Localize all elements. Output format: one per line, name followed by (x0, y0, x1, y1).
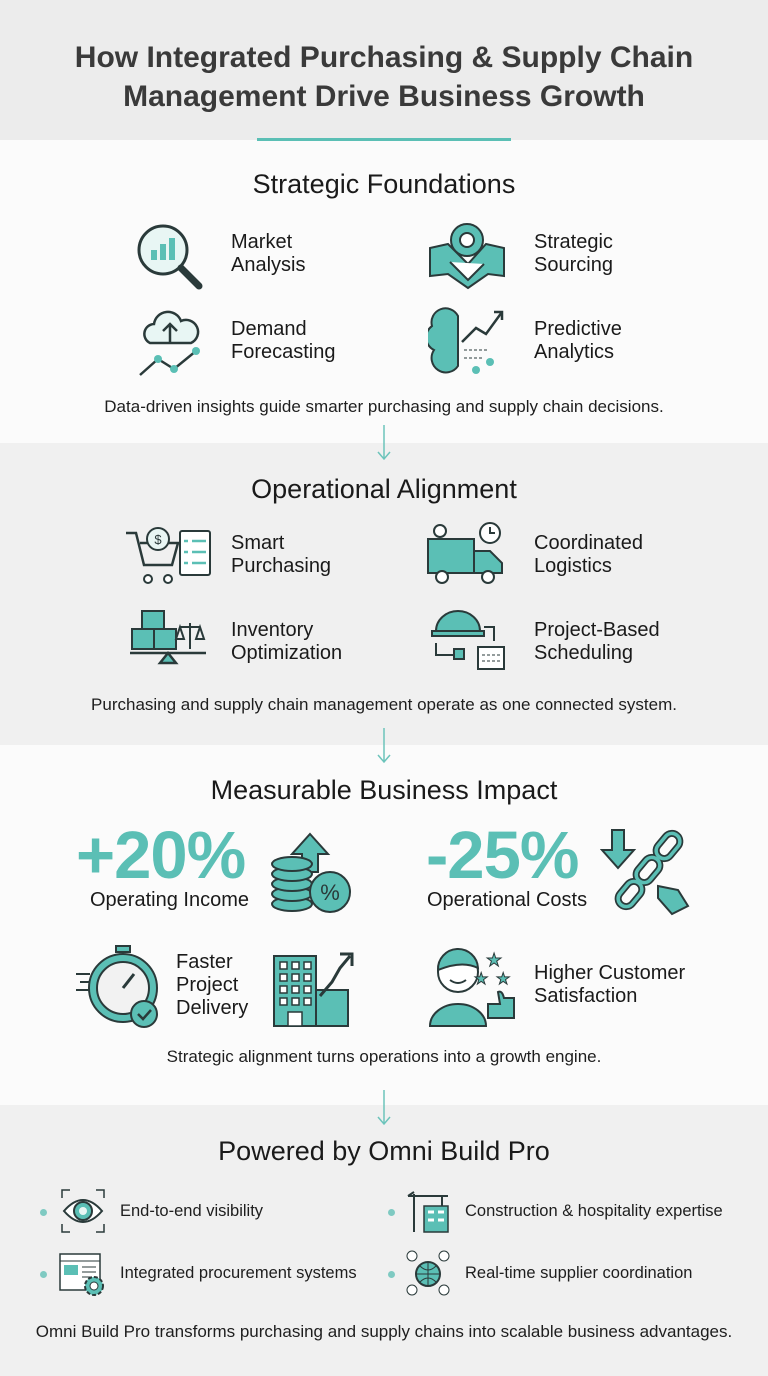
label: coordinated logistics: Coordinated (534, 532, 643, 554)
arrow 2 (378, 728, 390, 763)
icon: crane (408, 1191, 449, 1233)
item: real-time supplier coordination: Real-time supplier coordination (465, 1264, 692, 1282)
label: project-based scheduling: Scheduling (534, 642, 633, 664)
label: faster project delivery: Delivery (176, 997, 248, 1019)
icon: satisfied customer: ★ (486, 950, 502, 971)
item: end-to-end visibility (40, 1189, 263, 1233)
label: faster project delivery: Faster (176, 951, 233, 973)
icon: coins: % (320, 880, 340, 905)
icon: procurement screen (59, 1253, 104, 1296)
caption 3: Strategic alignment turns operations into a growth engine. (167, 1047, 601, 1066)
label: inventory optimization: Optimization (231, 642, 342, 664)
item: integrated procurement systems (40, 1253, 357, 1296)
stat: +20%: +20% (76, 818, 245, 893)
label: higher customer satisfaction (534, 962, 685, 1007)
heading: powered by omni build pro: Powered by Omni Build Pro (218, 1136, 550, 1166)
label: operating income: Operating Income (90, 889, 249, 911)
icon: broken chain (600, 829, 690, 916)
icon: stopwatch (76, 945, 158, 1028)
label: predictive analytics (534, 318, 622, 363)
label: strategic sourcing (534, 231, 613, 276)
label: demand forecasting: Forecasting (231, 341, 336, 363)
caption 1: Data-driven insights guide smarter purchasing and supply chain decisions. (104, 397, 664, 416)
item: integrated procurement systems: Integrated procurement systems (120, 1264, 357, 1282)
label: smart purchasing (231, 532, 331, 577)
caption 4: Omni Build Pro transforms purchasing and supply chains into scalable business advantages. (36, 1322, 732, 1341)
icon: smart purchasing: $ (154, 532, 162, 547)
title: How Integrated Purchasing & Supply Chain (75, 41, 693, 74)
icon: satisfied customer: ★ (496, 969, 510, 988)
label: higher customer satisfaction: Higher Customer (534, 962, 685, 984)
label: market analysis (231, 231, 305, 276)
icon: smart purchasing (126, 527, 211, 584)
label: inventory optimization: Inventory (231, 619, 313, 641)
icon: predictive analytics (428, 307, 504, 374)
label: market analysis: Analysis (231, 254, 305, 276)
icon: market analysis (138, 224, 202, 290)
item: construction & hospitality expertise (388, 1191, 723, 1233)
label: predictive analytics: Analytics (534, 341, 614, 363)
label: higher customer satisfaction: Satisfaction (534, 985, 637, 1007)
label: demand forecasting: Demand (231, 318, 307, 340)
icon: coins (271, 832, 351, 913)
label: strategic sourcing: Strategic (534, 231, 613, 253)
label: demand forecasting (231, 318, 336, 363)
item: real-time supplier coordination (388, 1250, 692, 1296)
heading: operational alignment: Operational Alignment (251, 474, 517, 504)
caption 2: Purchasing and supply chain management operate as one connected system. (91, 695, 677, 714)
arrow 3 (378, 1090, 390, 1125)
icon: eye (61, 1189, 105, 1233)
icon: project-based scheduling (431, 610, 505, 670)
heading: strategic foundations: Strategic Foundations (253, 169, 515, 199)
label: faster project delivery: Project (176, 974, 238, 996)
label: project-based scheduling (534, 619, 660, 664)
icon: building growth (273, 952, 354, 1027)
arrow 1 (378, 425, 390, 460)
icon: satisfied customer: ★ (474, 969, 488, 988)
icon: globe network (406, 1250, 450, 1296)
label: faster project delivery (176, 951, 248, 1019)
icon: strategic sourcing (429, 223, 505, 290)
title (75, 41, 693, 113)
icon: inventory optimization (130, 610, 206, 664)
label: project-based scheduling: Project-Based (534, 619, 660, 641)
label: coordinated logistics (534, 532, 643, 577)
label: smart purchasing: Purchasing (231, 555, 331, 577)
label: market analysis: Market (231, 231, 292, 253)
label: operational costs: Operational Costs (427, 889, 587, 911)
label: coordinated logistics: Logistics (534, 555, 612, 577)
item: construction & hospitality expertise: Construction & hospitality expertise (465, 1202, 723, 1220)
label: predictive analytics: Predictive (534, 318, 622, 340)
icon: satisfied customer (429, 948, 515, 1027)
label: smart purchasing: Smart (231, 532, 284, 554)
item: end-to-end visibility: End-to-end visibility (120, 1202, 263, 1220)
heading: measurable business impact: Measurable Business Impact (211, 775, 557, 805)
stat: -25%: -25% (426, 818, 578, 893)
label: strategic sourcing: Sourcing (534, 254, 613, 276)
icon: coordinated logistics (427, 522, 503, 584)
label: inventory optimization (231, 619, 342, 664)
title: Management Drive Business Growth (123, 80, 645, 113)
icon: demand forecasting (139, 310, 200, 376)
